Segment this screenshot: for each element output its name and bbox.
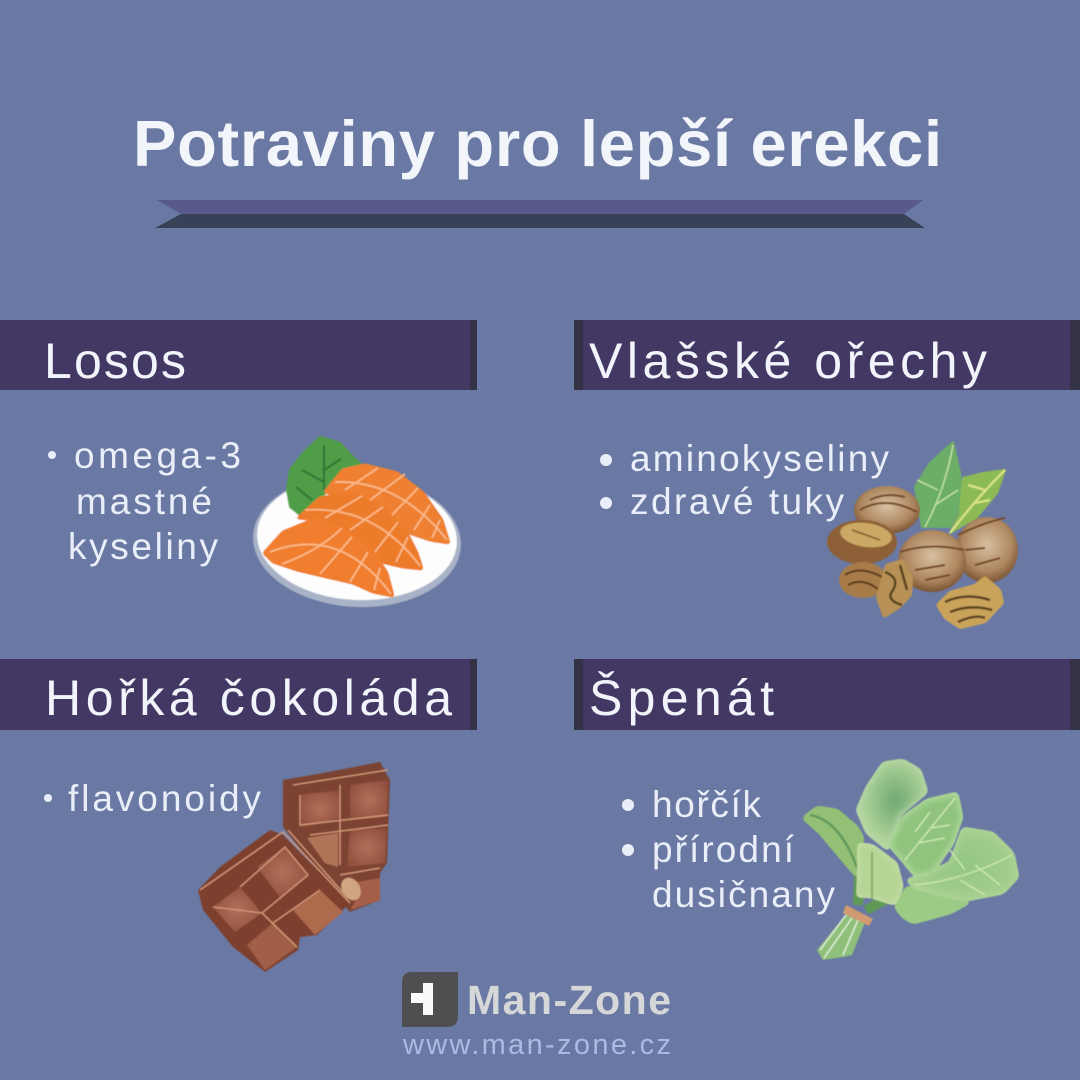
text: Losos nutrients: mastné [76, 481, 212, 522]
icon: logo square with cross [402, 972, 458, 1027]
text: spinach nutrients: dusičnany [652, 874, 836, 915]
icon: spinach bunch [803, 760, 1018, 960]
heading banner: Losos [0, 320, 477, 390]
panel: Hořká čokoláda [0, 659, 477, 972]
icon: salmon on a plate [250, 437, 464, 612]
panel: Špenát [574, 659, 1080, 960]
heading banner: Vlašské ořechy: Vlašské ořechy [589, 333, 987, 389]
panel: Losos [0, 320, 477, 612]
title: Potraviny pro lepší erekci [133, 107, 942, 180]
text: walnut nutrients: zdravé tuky [630, 481, 844, 522]
text: spinach nutrients [622, 784, 836, 915]
icon: chocolate bar [198, 762, 390, 972]
text: spinach nutrients: přírodní [652, 829, 795, 870]
text: walnut nutrients: aminokyseliny [630, 438, 890, 479]
text: spinach nutrients: hořčík [652, 784, 762, 825]
icon: walnuts with leaves [827, 442, 1018, 628]
heading banner: Hořká čokoláda: Hořká čokoláda [45, 670, 452, 726]
text: Losos nutrients: omega-3 [74, 435, 241, 476]
title ribbon [155, 200, 925, 228]
panel: Vlašské ořechy [574, 320, 1080, 628]
text: chocolate nutrients: flavonoidy [68, 778, 262, 819]
text: Losos nutrients: kyseliny [68, 526, 218, 567]
logo wordmark: Man-Zone [467, 977, 671, 1023]
logo: Man-Zone [402, 972, 671, 1027]
heading banner: Špenát: Špenát [589, 670, 774, 726]
website url: www.man-zone.cz [402, 1029, 671, 1061]
text: walnut nutrients [600, 438, 890, 522]
text: Losos nutrients [48, 435, 241, 567]
heading banner: Hořká čokoláda [0, 659, 477, 730]
heading banner: Špenát [574, 659, 1080, 730]
heading banner: Vlašské ořechy [574, 320, 1080, 390]
heading banner: Losos: Losos [44, 333, 186, 389]
